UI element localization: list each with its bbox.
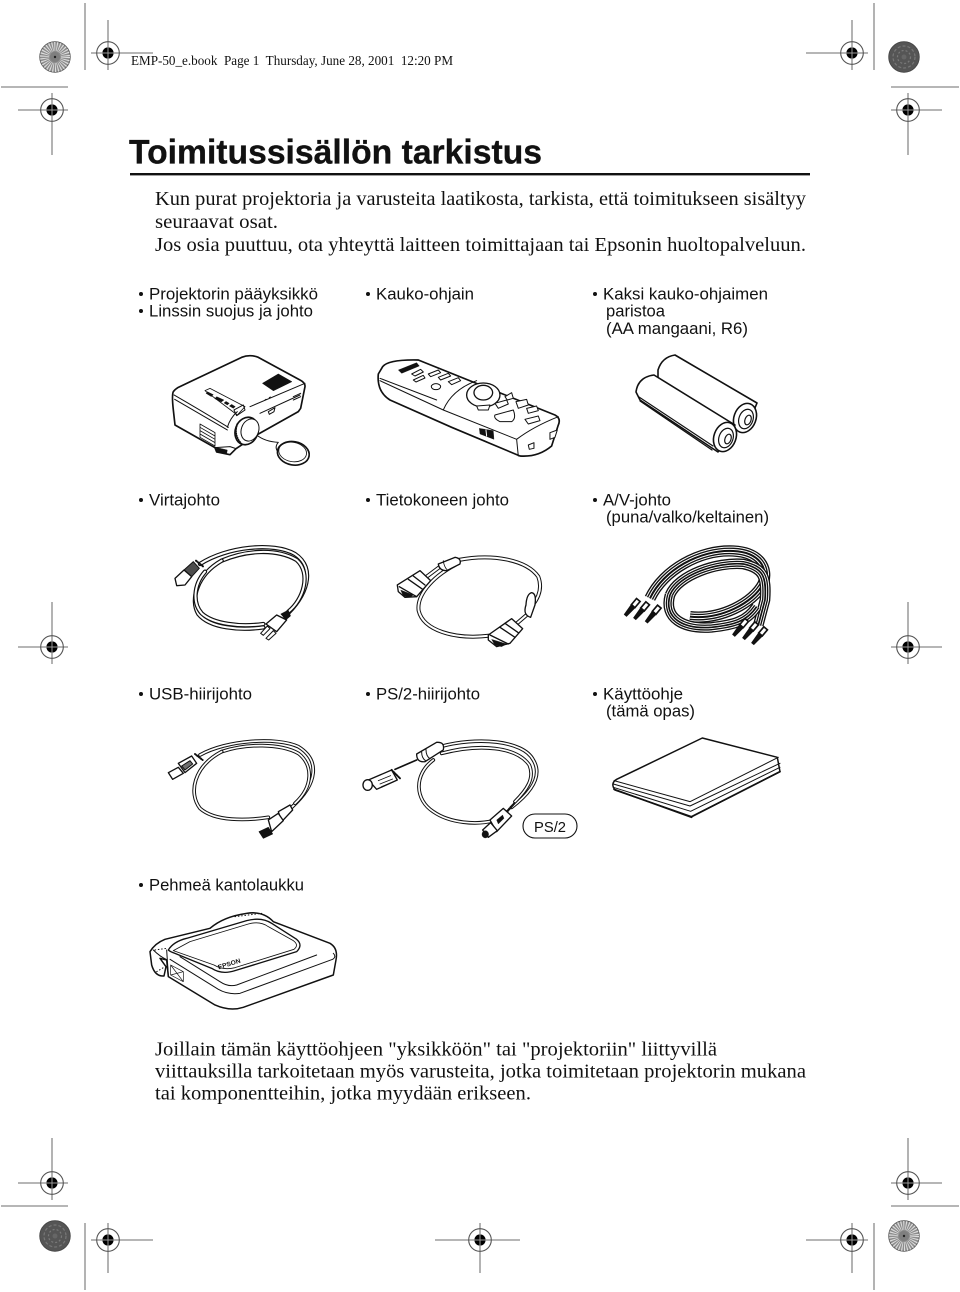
- item: projector and lens cover: Linssin suojus ja johto: [149, 302, 313, 320]
- item: projector and lens cover: [139, 284, 318, 320]
- item: user manual: [593, 684, 695, 720]
- colour target bottom left: [40, 1221, 70, 1251]
- illustration: manual: [613, 738, 780, 817]
- registration mark top left: [91, 20, 153, 70]
- registration mark top right: [806, 20, 868, 70]
- registration mark bottom right: [806, 1223, 868, 1273]
- illustration: projector: [172, 356, 311, 468]
- item: batteries: [593, 284, 768, 338]
- item: soft carrying case: Pehmeä kantolaukku: [149, 876, 304, 894]
- registration mark middle right: [891, 602, 942, 664]
- closing paragraph: Joillain tämän käyttöohjeen "yksikköön" tai "projektoriin" liittyvillä: [155, 1038, 717, 1060]
- illustration: PS/2 cable: [363, 741, 537, 838]
- item: remote control: Kauko-ohjain: [376, 284, 474, 304]
- registration mark middle left: [18, 602, 68, 664]
- registration mark lower left: [18, 1138, 68, 1200]
- item: USB mouse cable: USB-hiirijohto: [149, 684, 252, 704]
- illustration: power cable: [175, 547, 307, 640]
- illustration: computer cable: [397, 557, 540, 647]
- registration mark upper right: [891, 93, 942, 155]
- title rule: [130, 173, 810, 175]
- colour target top left: [40, 42, 70, 72]
- closing paragraph: viittauksilla tarkoitetaan myös varusteita, jotka toimitetaan projektorin mukana: [155, 1060, 806, 1082]
- PS/2 label: [523, 814, 577, 838]
- item: power cable: Virtajohto: [149, 490, 220, 510]
- illustration: carrying case: [150, 913, 336, 1009]
- item: AV cable: (puna/valko/keltainen): [606, 508, 769, 526]
- title: Toimitussisällön tarkistus: [129, 134, 542, 172]
- closing paragraph: [155, 1038, 806, 1104]
- illustration: carrying case: EPSON: [217, 958, 242, 971]
- item: user manual: (tämä opas): [606, 702, 695, 720]
- print header line: EMP-50_e.book Page 1 Thursday, June 28, 2001 12:20 PM: [131, 53, 453, 68]
- intro paragraph: Jos osia puuttuu, ota yhteyttä laitteen toimittajaan tai Epsonin huoltopalveluun.: [155, 234, 806, 256]
- item: AV cable: [593, 490, 769, 526]
- intro paragraph: seuraavat osat.: [155, 211, 278, 233]
- closing paragraph: tai komponentteihin, jotka myydään erikseen.: [155, 1082, 531, 1104]
- colour target bottom right: [889, 1221, 919, 1251]
- item: computer cable: Tietokoneen johto: [376, 490, 509, 510]
- item: PS/2 mouse cable: PS/2-hiirijohto: [376, 684, 480, 704]
- intro paragraph: Kun purat projektoria ja varusteita laatikosta, tarkista, että toimitukseen sisältyy: [155, 188, 806, 210]
- item: batteries: paristoa: [606, 302, 666, 320]
- illustration: AV cable: [624, 551, 767, 645]
- item: batteries: (AA mangaani, R6): [606, 319, 748, 338]
- colour target top right: [889, 42, 919, 72]
- item: user manual: Käyttöohje: [603, 684, 683, 704]
- intro paragraph: [155, 188, 806, 256]
- item: batteries: Kaksi kauko-ohjaimen: [603, 284, 768, 304]
- illustration: remote control: [378, 360, 559, 456]
- registration mark bottom centre: [435, 1223, 520, 1273]
- item: AV cable: A/V-johto: [603, 490, 671, 510]
- illustration: batteries: [636, 355, 760, 455]
- item: projector and lens cover: Projektorin pääyksikkö: [149, 284, 318, 304]
- PS/2 label: PS/2: [534, 820, 566, 836]
- registration mark bottom left: [91, 1223, 153, 1273]
- registration mark upper left: [18, 93, 68, 155]
- illustration: USB cable: [168, 741, 313, 838]
- registration mark lower right: [891, 1138, 942, 1200]
